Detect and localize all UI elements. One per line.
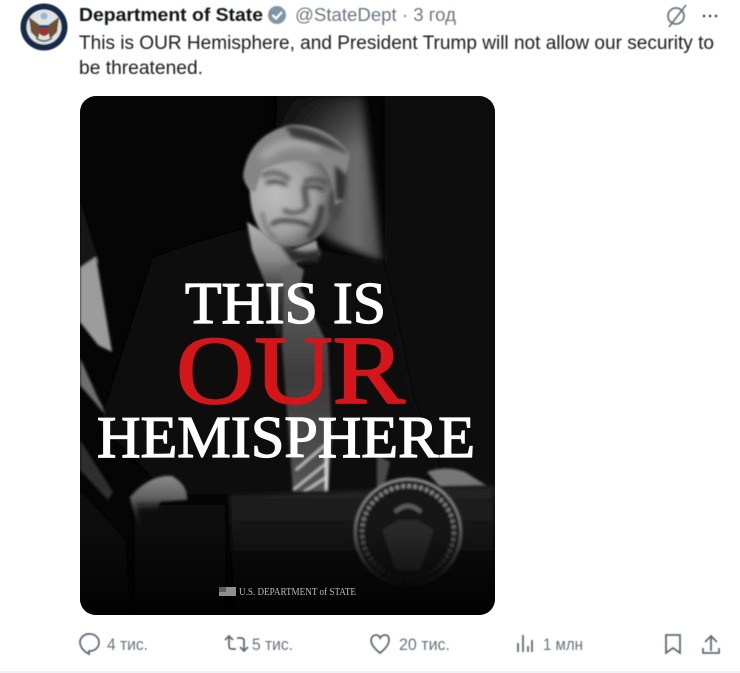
post text (79, 33, 714, 79)
flag at left (80, 210, 114, 615)
bottom fade (80, 535, 495, 615)
reply count: 4 тис. (107, 636, 148, 654)
footer logo: flag and U.S. Department of State (219, 587, 356, 596)
icon: Grok slash circle (668, 5, 686, 27)
hair (243, 125, 350, 205)
podium (229, 486, 495, 615)
footer logo: flag and U.S. Department of State: U.S. DEPARTMENT of STATE (239, 587, 356, 598)
face (248, 159, 332, 248)
tie (280, 263, 390, 492)
poster dark background (80, 96, 495, 615)
icon: views (518, 635, 532, 652)
avatar: Department of State seal (20, 4, 68, 50)
suit jacket (102, 258, 385, 454)
headline: HEMISPHERE: HEMISPHERE (97, 404, 475, 470)
post header: author, handle and time: @StateDept · 3 год (295, 4, 456, 25)
backdrop light curtain (270, 96, 382, 262)
icon: like (371, 635, 389, 653)
headline: OUR: OUR (176, 317, 406, 425)
post header: author, handle and time: Department of State (79, 4, 263, 25)
icon: reply (80, 634, 99, 654)
icon: more menu dots (702, 14, 718, 18)
icon: share (703, 636, 719, 653)
poster image panel (80, 96, 495, 615)
icon: repost (225, 636, 248, 651)
post text: This is OUR Hemisphere, and President Trump will not allow our security to (79, 33, 714, 54)
action bar (80, 634, 719, 654)
shirt collar (247, 222, 320, 345)
eyes, nose and mouth (262, 173, 328, 238)
head and hair portrait (243, 125, 350, 262)
post header: author, handle and time (79, 4, 456, 25)
icon: verified badge (268, 6, 286, 24)
ear (328, 190, 342, 220)
post text: be threatened. (79, 58, 203, 79)
icon: bookmark (666, 635, 680, 653)
repost count: 5 тис. (252, 636, 293, 654)
presidential seal (354, 478, 462, 586)
headline: THIS IS: THIS IS (185, 270, 386, 336)
like count: 20 тис. (399, 636, 450, 654)
neck shadow (278, 244, 322, 265)
lower hands (128, 467, 487, 520)
views count: 1 млн (543, 636, 583, 654)
